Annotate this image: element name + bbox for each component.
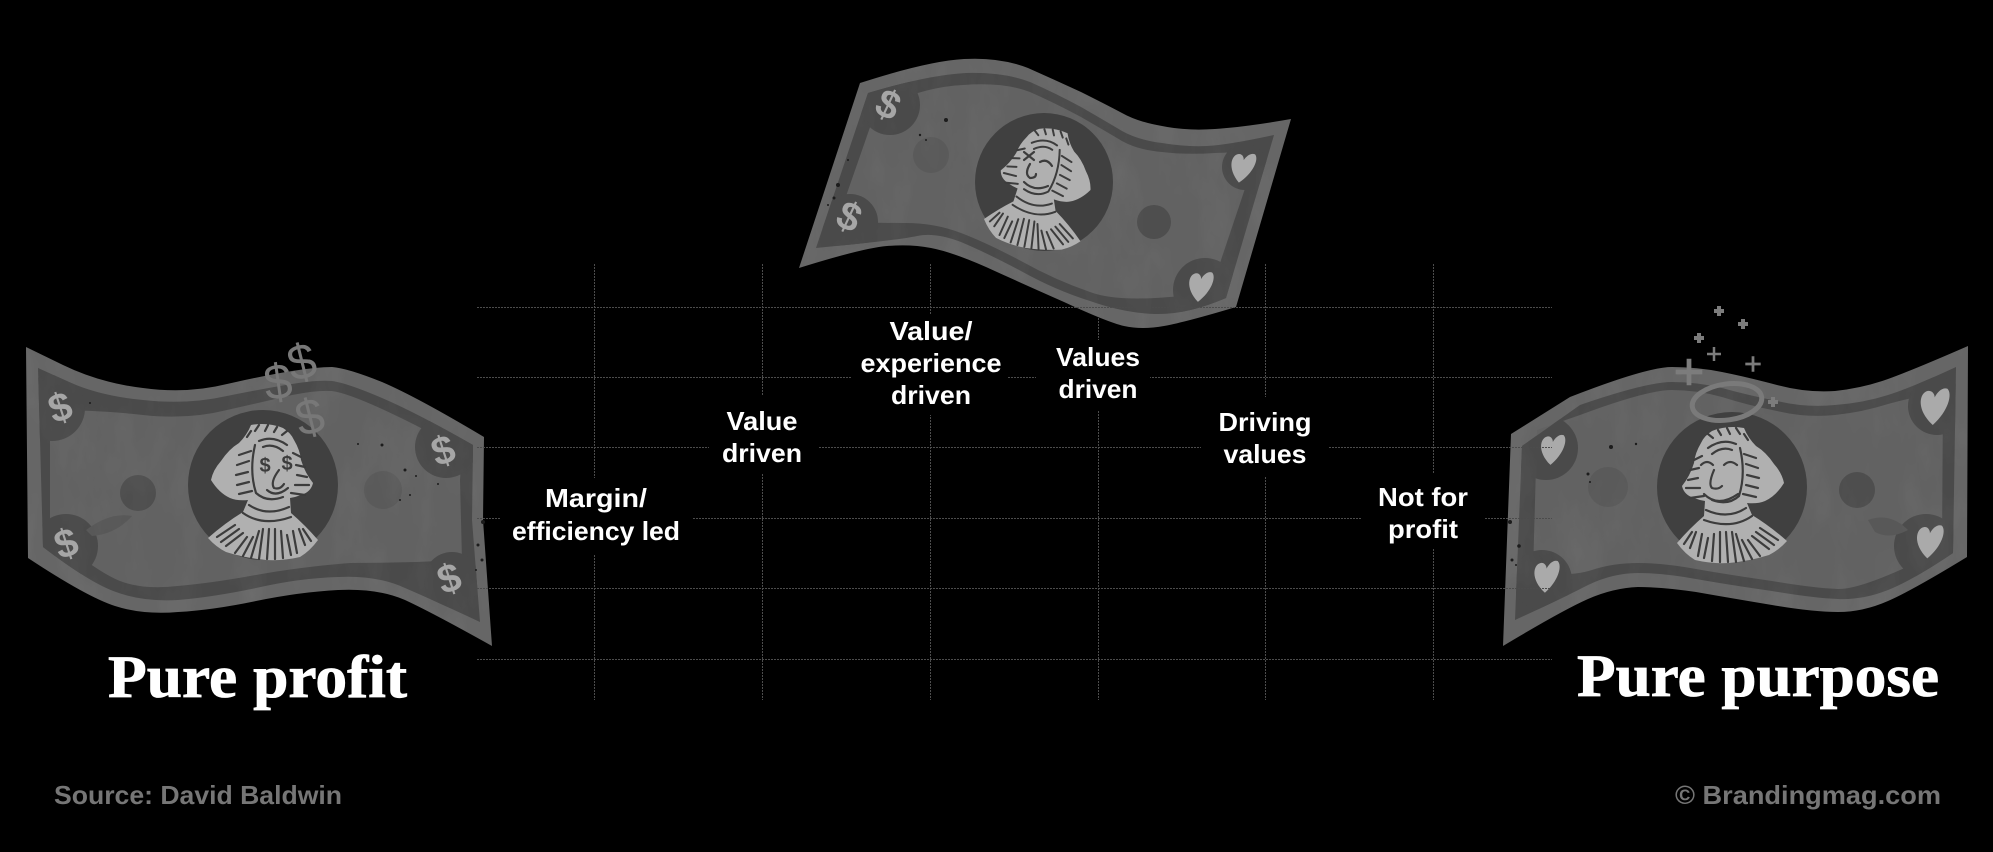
icon: corner dollars: $ (49, 520, 84, 568)
banknote: middle (795, 55, 1295, 335)
label: values driven: Values (1056, 342, 1140, 372)
label: margin/efficiency led: efficiency led (512, 516, 680, 546)
label: value driven: driven (722, 438, 802, 468)
icon: corner dollars: $ (432, 555, 467, 603)
horizontal grid lines (477, 308, 1552, 660)
icon: corner dollars and hearts: $ (869, 80, 907, 130)
portrait medallion: $ (281, 453, 293, 475)
label: value/experience driven: experience (860, 348, 1002, 378)
label: value/experience driven: driven (891, 380, 971, 410)
vertical grid lines (594, 264, 1434, 700)
banknote: pure profit (19, 331, 500, 650)
specks (89, 402, 485, 571)
portrait medallion (188, 410, 338, 560)
label: driving values: Driving (1218, 407, 1312, 437)
icon: floating dollar signs: $ (260, 352, 296, 412)
label: margin/efficiency led: Margin/ (545, 483, 647, 513)
source note: Source: David Baldwin (54, 780, 342, 810)
heading: pure purpose: Pure purpose (1577, 643, 1939, 709)
icon: sparkles (1676, 306, 1778, 407)
icon: floating dollar signs (260, 331, 330, 448)
icon: corner dollars (43, 384, 467, 603)
copyright note: © Brandingmag.com (1675, 780, 1941, 810)
icon: halo (1690, 379, 1764, 425)
banknote: pure purpose (1500, 306, 1970, 650)
icon: corner dollars and hearts (830, 80, 1257, 304)
label: not for profit (1362, 473, 1484, 549)
label: values driven: driven (1058, 374, 1138, 404)
label: value/experience driven: Value/ (890, 316, 972, 346)
label: values driven (1036, 340, 1150, 410)
label: not for profit: Not for (1378, 482, 1468, 512)
icon: floating dollar signs: $ (289, 386, 330, 448)
label: margin/efficiency led (501, 478, 693, 555)
icon: corner dollars: $ (426, 427, 461, 475)
label: value driven: Value (726, 406, 798, 436)
specks (827, 118, 948, 206)
specks (1508, 443, 1637, 566)
icon: floating dollar signs: $ (281, 331, 322, 393)
label: value/experience driven (851, 315, 1008, 415)
label: driving values (1201, 397, 1328, 477)
portrait medallion: $ (259, 455, 271, 477)
icon: corner dollars: $ (43, 384, 78, 432)
label: driving values: values (1224, 439, 1306, 469)
portrait medallion (1657, 412, 1807, 563)
icon: corner dollars and hearts: $ (830, 192, 868, 242)
portrait medallion (975, 113, 1113, 261)
icon: corner hearts (1533, 387, 1950, 594)
label: value driven (709, 395, 818, 473)
label: not for profit: profit (1388, 514, 1458, 544)
heading: pure profit: Pure profit (108, 644, 407, 710)
